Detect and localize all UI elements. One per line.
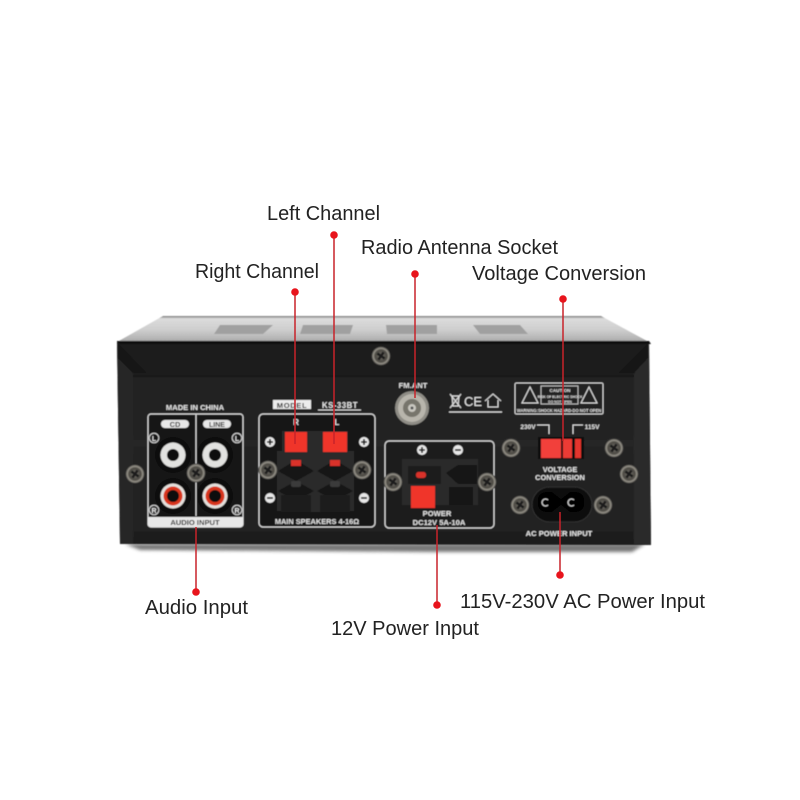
channel markers: L bbox=[152, 436, 157, 443]
audio input caption: AUDIO INPUT bbox=[170, 518, 220, 527]
callout: radio antenna socket bbox=[361, 237, 558, 398]
audio input panel bbox=[148, 403, 243, 527]
channel markers: R bbox=[151, 508, 157, 515]
caution label: CAUTION bbox=[550, 388, 571, 393]
model number: KS-33BT bbox=[322, 401, 358, 410]
DC power panel bbox=[385, 441, 494, 528]
rear panel bbox=[117, 341, 651, 545]
callout: audio input bbox=[145, 527, 248, 619]
plus and minus markers bbox=[265, 437, 369, 503]
antenna socket: FM.ANT bbox=[399, 381, 428, 390]
caution label: DO NOT OPEN bbox=[548, 400, 572, 404]
certification logos bbox=[449, 394, 502, 412]
callout: audio input: Audio Input bbox=[145, 597, 248, 619]
certification logos: CE bbox=[464, 394, 482, 409]
callout: AC power input: 115V-230V AC Power Input bbox=[460, 591, 705, 613]
voltage switch: 115V bbox=[585, 424, 600, 431]
mounting screws bbox=[126, 346, 638, 514]
callout: AC power input bbox=[460, 512, 705, 613]
callout: voltage conversion: Voltage Conversion bbox=[472, 263, 646, 285]
antenna socket bbox=[395, 381, 429, 425]
speaker panel: L bbox=[335, 418, 340, 427]
callout: voltage conversion bbox=[472, 263, 646, 441]
bottom shadow bbox=[125, 544, 645, 552]
AC inlet: AC POWER INPUT bbox=[526, 529, 593, 538]
callout: right channel: Right Channel bbox=[195, 261, 319, 283]
amplifier rear view bbox=[117, 316, 651, 552]
callout: right channel bbox=[195, 261, 319, 444]
DC power panel: DC12V 5A-10A bbox=[413, 518, 466, 527]
voltage switch: VOLTAGE bbox=[543, 465, 577, 474]
callout: radio antenna socket: Radio Antenna Socket bbox=[361, 237, 558, 259]
voltage switch: CONVERSION bbox=[535, 473, 585, 482]
LINE tag: LINE bbox=[209, 422, 225, 429]
callout: left channel bbox=[267, 203, 380, 444]
channel markers: R bbox=[234, 508, 240, 515]
channel markers bbox=[149, 433, 242, 515]
caution label: WARNING:SHOCK HAZARD-DO NOT OPEN bbox=[517, 408, 601, 413]
caution label: RISK OF ELECTRIC SHOCK bbox=[538, 395, 583, 399]
model label: MODEL bbox=[277, 401, 307, 410]
speaker panel: R bbox=[293, 418, 299, 427]
callout: left channel: Left Channel bbox=[267, 203, 380, 225]
speaker panel bbox=[259, 400, 375, 527]
made in china heading: MADE IN CHINA bbox=[166, 403, 225, 412]
CD tag: CD bbox=[170, 420, 181, 429]
channel markers: L bbox=[235, 436, 240, 443]
DC power panel: POWER bbox=[423, 509, 452, 518]
callout: 12V power input: 12V Power Input bbox=[331, 618, 479, 640]
voltage switch: 230V bbox=[520, 424, 536, 431]
amplifier top cover bbox=[117, 316, 649, 342]
voltage switch bbox=[520, 424, 600, 482]
callout: 12V power input bbox=[331, 525, 479, 640]
speaker caption: MAIN SPEAKERS 4-16Ω bbox=[275, 517, 359, 526]
caution label bbox=[515, 383, 603, 414]
AC inlet bbox=[526, 487, 593, 538]
RCA sockets bbox=[155, 437, 233, 514]
